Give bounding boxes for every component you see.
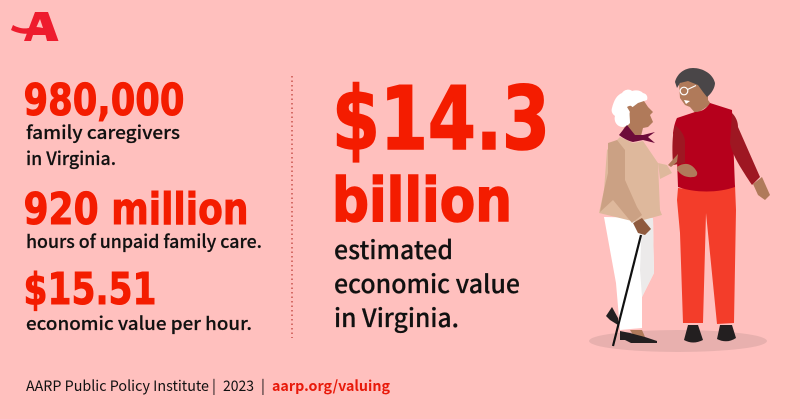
stat: value per hour [24, 264, 252, 336]
footer source line [26, 375, 390, 396]
headline stat: economic value: billion [332, 165, 512, 236]
head [620, 98, 653, 140]
headline stat: economic value: $14.3 [332, 68, 550, 170]
stat: hours of care [24, 184, 262, 254]
footer source line: 2023 [223, 375, 254, 396]
footer source line: | [212, 375, 216, 396]
stat: family caregivers: 980,000 [24, 75, 184, 126]
stat: hours of care: 920 million [24, 184, 248, 235]
scarf [619, 125, 655, 143]
stat: family caregivers [24, 75, 184, 171]
stat: family caregivers: in Virginia. [26, 145, 116, 171]
stat: family caregivers: family caregivers [26, 119, 180, 145]
headline stat: economic value: economic value [334, 265, 520, 301]
figure: caregiver [672, 68, 770, 342]
ground shadow [589, 330, 767, 352]
sweater [599, 137, 662, 222]
stat: value per hour: $15.51 [24, 264, 156, 315]
headline stat: economic value: estimated [334, 231, 453, 267]
footer source line: aarp.org/valuing [272, 375, 390, 396]
icon: AARP logo [11, 12, 58, 41]
footer source line: AARP Public Policy Institute [26, 375, 209, 396]
cane hand [633, 218, 651, 235]
figure: older woman [599, 90, 678, 346]
footer source line: | [261, 375, 265, 396]
hair [612, 90, 647, 127]
stat: hours of care: hours of unpaid family care. [26, 228, 262, 254]
illustration: caregiver and older woman [589, 68, 770, 352]
cane [613, 235, 641, 346]
stat: value per hour: economic value per hour. [26, 310, 252, 336]
headline stat: economic value [332, 68, 550, 335]
headline stat: economic value: in Virginia. [334, 299, 459, 335]
